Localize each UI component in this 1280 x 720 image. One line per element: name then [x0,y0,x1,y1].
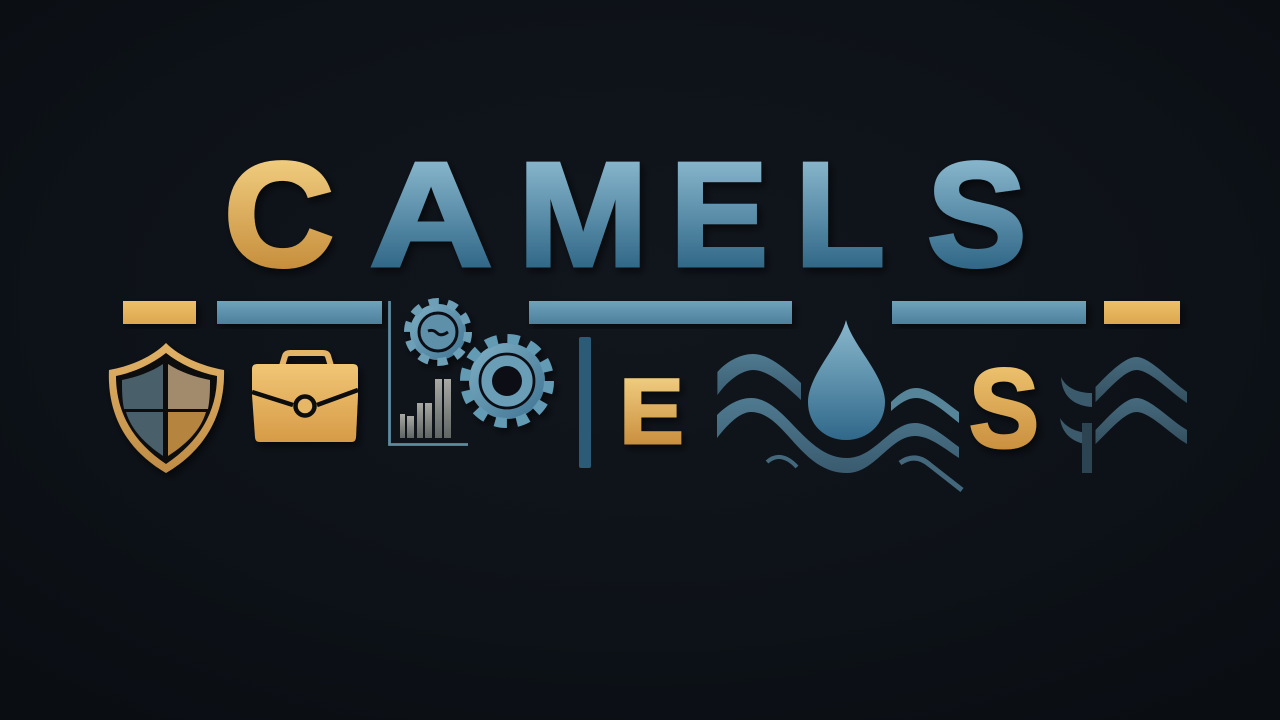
letter C: C [224,132,334,298]
letter E: E [620,361,684,463]
vertical divider [579,337,591,468]
letter A: A [370,132,492,298]
icon: large gear [465,339,549,423]
letter S: S [927,132,1026,298]
icon: water drop [808,320,885,440]
letter M: M [518,132,648,298]
icon: small gear [408,302,468,362]
icon: right waves and plant [1060,357,1187,473]
icon: waves [717,354,962,490]
letter L: L [795,132,885,298]
icon: shield [109,343,224,473]
icon: briefcase [252,353,358,442]
letter S: S [969,346,1039,471]
title: CAMELS [224,132,1026,298]
divider bars [123,301,1180,324]
letter E: E [670,132,768,298]
icon: bar chart [390,301,468,444]
